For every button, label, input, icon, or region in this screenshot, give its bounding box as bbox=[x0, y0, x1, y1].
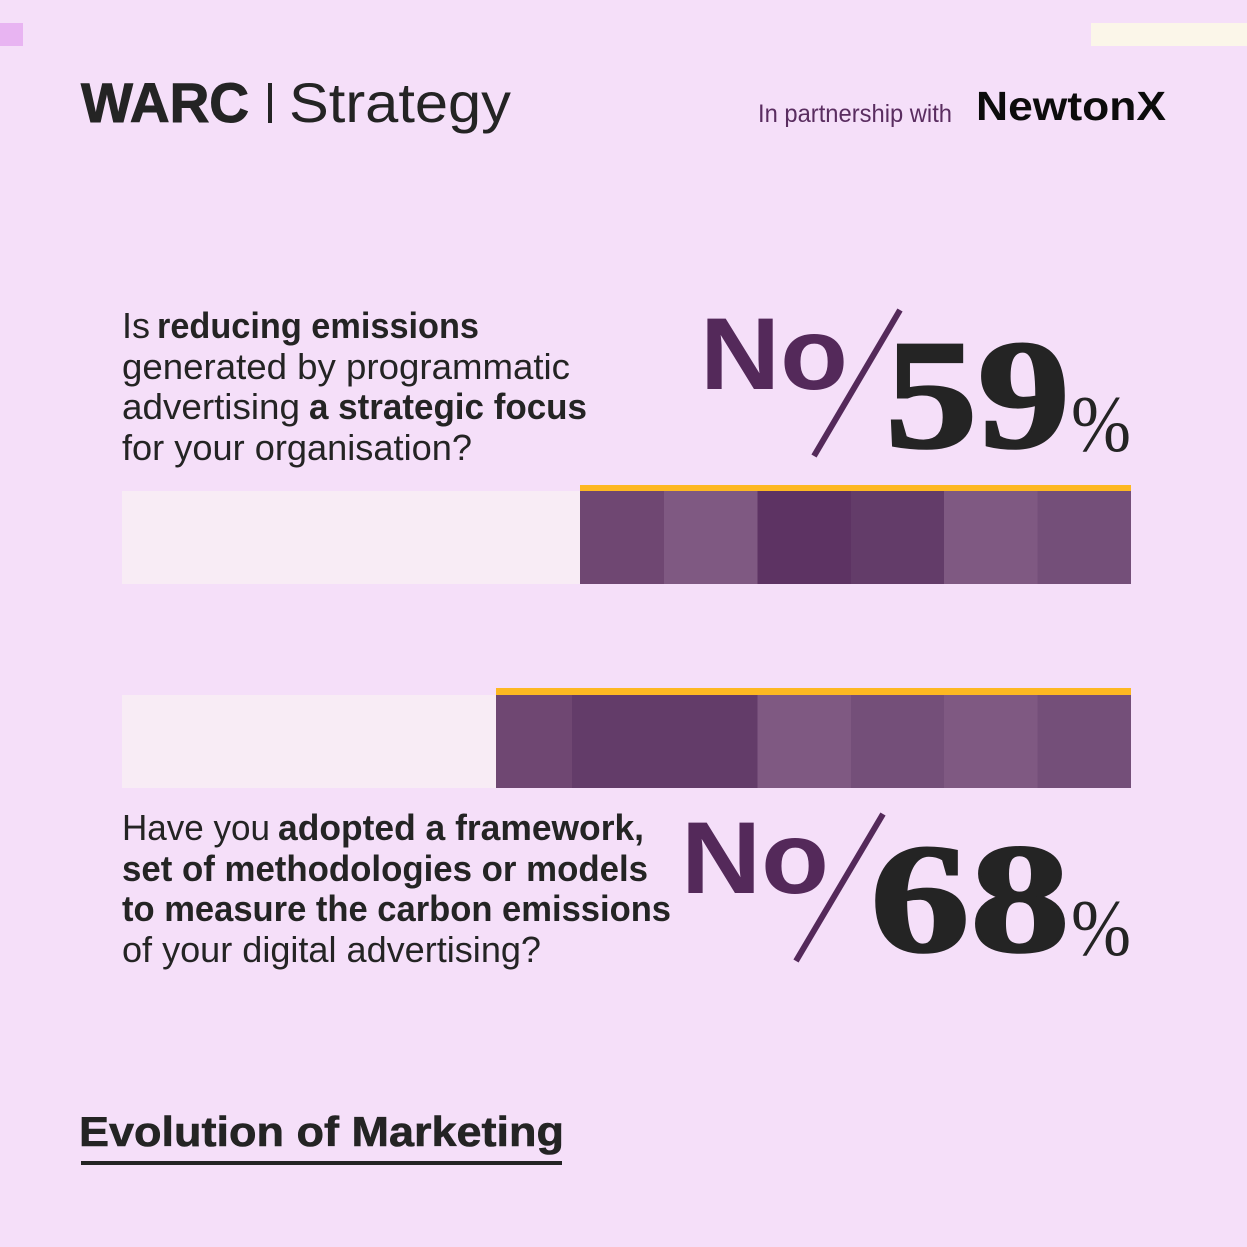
footer series title: Evolution of Marketing: Evolution of Marketing bbox=[79, 1108, 564, 1155]
question 1 text bbox=[122, 305, 587, 468]
question 2 text bbox=[122, 807, 671, 970]
statistic: No 68% bbox=[681, 801, 1131, 985]
question 1 text: for your organisation? bbox=[122, 427, 472, 468]
question 1 text: a strategic focus bbox=[309, 386, 587, 427]
bar chart 2: 68% No bbox=[122, 688, 1131, 788]
statistic: No 59% bbox=[700, 297, 1131, 481]
question 1 text: reducing emissions bbox=[157, 305, 479, 346]
top-right accent bar bbox=[1091, 23, 1247, 46]
question 1 text: generated by programmatic bbox=[122, 346, 570, 387]
question 2 text: to measure the carbon emissions bbox=[122, 888, 671, 929]
statistic: No 59%: % bbox=[1071, 381, 1131, 469]
top-left accent square bbox=[0, 23, 23, 46]
question 1 text: Is bbox=[122, 305, 150, 346]
question 2 text: adopted a framework, bbox=[278, 807, 644, 848]
header logo: WARC Strategy: Strategy bbox=[289, 71, 511, 134]
bar chart 1: 59% No bbox=[122, 485, 1131, 584]
statistic: No 68%: 68 bbox=[870, 812, 1070, 985]
header logo: WARC Strategy: WARC bbox=[81, 71, 249, 134]
question 2 text: Have you bbox=[122, 807, 270, 848]
question 2 text: set of methodologies or models bbox=[122, 848, 648, 889]
statistic: No 68%: No bbox=[681, 801, 829, 915]
question 1 text: advertising bbox=[122, 386, 300, 427]
partner logo: NewtonX: NewtonX bbox=[976, 83, 1166, 129]
statistic: No 59%: No bbox=[700, 297, 848, 411]
partnership label: In partnership with bbox=[758, 100, 952, 128]
statistic: No 68%: % bbox=[1071, 885, 1131, 973]
header logo: WARC Strategy bbox=[81, 71, 511, 134]
statistic: No 59%: 59 bbox=[885, 308, 1070, 481]
question 2 text: of your digital advertising? bbox=[122, 929, 541, 970]
